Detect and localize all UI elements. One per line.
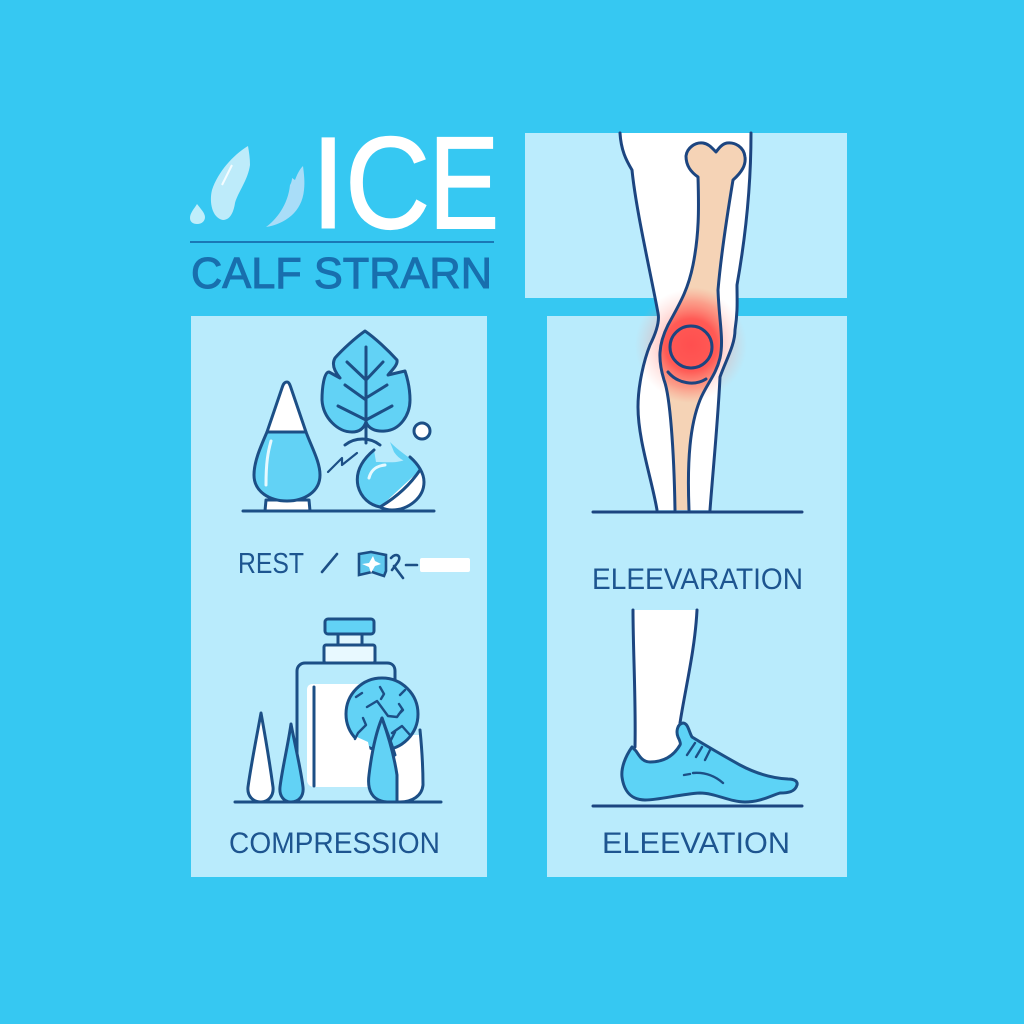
- icon: bottle: [297, 619, 423, 802]
- floor line: [593, 804, 802, 808]
- icon: cracked ice ball: [346, 678, 418, 760]
- title underline: [190, 241, 494, 243]
- inflammation halo: [635, 289, 747, 401]
- icon: leaf: [322, 331, 410, 445]
- panel: top right leg background: [525, 133, 847, 298]
- panel: elevation: [547, 316, 847, 877]
- illustration: lower leg and shoe: [593, 610, 802, 806]
- white bar: [420, 558, 470, 572]
- subtitle: CALF STRARN: [191, 249, 492, 298]
- bone: [660, 143, 745, 510]
- leg silhouette: [620, 133, 751, 510]
- label: rest: REST: [238, 548, 304, 580]
- icon: water drop cone: [254, 382, 320, 511]
- floor line: [235, 800, 441, 804]
- title: ICE: C: [345, 110, 430, 256]
- icon: small white cone: [248, 713, 273, 802]
- icon: ice ball: [357, 442, 424, 510]
- panel: rest and compression: [191, 316, 487, 877]
- illustration: leg with inflamed knee: [593, 133, 802, 512]
- title: ICE: E: [429, 111, 499, 257]
- icon: ice droplets: [190, 146, 304, 227]
- label: eleevation: ELEEVATION: [602, 827, 790, 860]
- title: ICE: I: [310, 109, 346, 256]
- title: ICE: [310, 109, 499, 257]
- icon: small circle: [414, 423, 430, 439]
- illustration: compression: [235, 619, 441, 802]
- label: compression: COMPRESSION: [229, 827, 440, 860]
- floor line: [593, 510, 802, 514]
- icon: large cone: [369, 718, 397, 802]
- lower leg: [633, 610, 697, 775]
- inflammation glow: [661, 290, 720, 400]
- floor line: [243, 510, 434, 512]
- shoe: [622, 723, 797, 802]
- icon: lightning spark: [328, 453, 357, 472]
- label: eleevaration: ELEEVARATION: [592, 563, 803, 596]
- illustration: rest icons: [243, 331, 434, 511]
- icon: small blue cone: [280, 724, 303, 802]
- icon: garbled slash and ice glyph: [322, 552, 417, 578]
